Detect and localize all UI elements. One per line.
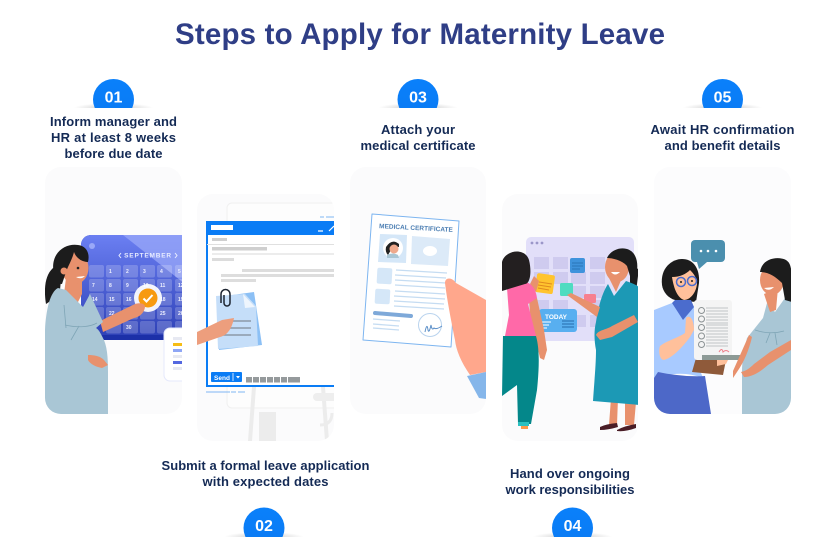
hand — [197, 318, 234, 345]
calendar: 7 — [92, 283, 95, 289]
step 05 — [650, 79, 795, 414]
badge 02: 02 — [255, 518, 273, 535]
certificate — [363, 214, 459, 347]
icon: orange check badge — [134, 284, 162, 312]
email window — [197, 221, 342, 386]
step 01 — [45, 79, 182, 414]
caption 02: Submit a formal leave application — [162, 458, 370, 473]
title: Steps to Apply for Maternity Leave — [175, 18, 665, 51]
caption 01: before due date — [64, 146, 162, 161]
pregnant employee — [733, 258, 795, 414]
calendar: SEPTEMBER — [124, 252, 172, 260]
caption 04 — [504, 466, 634, 497]
colleague in pink — [502, 252, 547, 429]
pregnant woman in teal — [567, 248, 640, 431]
caption 01: Inform manager and — [50, 114, 177, 129]
badge 03: 03 — [409, 90, 427, 106]
badge 01: 01 — [105, 90, 122, 106]
illustration: HR person with pregnant employee — [654, 240, 791, 414]
calendar: 16 — [126, 297, 132, 303]
today card: TODAY — [545, 314, 568, 321]
badge 05: 05 — [714, 90, 732, 106]
attached document — [216, 290, 262, 350]
illustration: medical certificate in hand — [362, 214, 486, 399]
calendar: 22 — [109, 311, 115, 317]
calendar — [81, 235, 182, 340]
calendar: 23 — [126, 311, 132, 317]
calendar: 15 — [109, 297, 115, 303]
caption 03 — [360, 122, 476, 153]
HR woman — [654, 259, 728, 414]
calendar: 25 — [160, 311, 166, 317]
sticky notes — [535, 258, 596, 303]
send button: Send — [214, 375, 230, 382]
planning board — [526, 237, 634, 341]
woman — [45, 245, 145, 414]
badge 02 — [230, 508, 298, 537]
caption 03: Attach your — [381, 122, 455, 137]
badge 05 — [688, 79, 756, 108]
calendar: 5 — [178, 269, 181, 275]
calendar: 18 — [160, 297, 166, 303]
calendar: 11 — [160, 283, 166, 289]
caption 04: Hand over ongoing — [510, 466, 630, 481]
certificate: MEDICAL CERTIFICATE — [379, 223, 454, 234]
calendar: 19 — [178, 297, 184, 303]
illustration: email with attached document — [197, 202, 334, 441]
calendar: 26 — [178, 311, 184, 317]
step 02 — [162, 194, 370, 548]
small list card — [164, 328, 182, 382]
speech bubble — [691, 240, 725, 269]
calendar: 10 — [143, 283, 149, 289]
caption 04: work responsibilities — [504, 482, 634, 497]
calendar: 8 — [109, 283, 112, 289]
illustration: woman pointing at calendar — [45, 235, 182, 414]
background board and stand — [226, 202, 334, 441]
calendar: 4 — [160, 269, 163, 275]
badge 03 — [384, 79, 452, 108]
caption 05: and benefit details — [664, 138, 780, 153]
badge 01 — [80, 79, 148, 108]
calendar: 9 — [126, 283, 129, 289]
caption 02: with expected dates — [202, 474, 328, 489]
calendar: 30 — [126, 325, 132, 331]
calendar: 2 — [126, 269, 129, 275]
caption 01 — [50, 114, 177, 161]
hand — [445, 278, 486, 399]
calendar: 3 — [143, 269, 146, 275]
badge 04 — [538, 508, 606, 537]
badge 04: 04 — [564, 518, 582, 535]
illustration: handover at planning board — [502, 237, 638, 432]
calendar: 14 — [92, 297, 98, 303]
calendar: 1 — [109, 269, 112, 275]
caption 02 — [162, 458, 370, 489]
step 04 — [502, 237, 638, 537]
checklist — [694, 300, 742, 360]
caption 05: Await HR confirmation — [650, 122, 795, 137]
send button — [211, 372, 242, 382]
caption 01: HR at least 8 weeks — [51, 130, 176, 145]
caption 05 — [650, 122, 795, 153]
caption 03: medical certificate — [360, 138, 476, 153]
step 03 — [361, 79, 486, 399]
calendar: 12 — [178, 283, 184, 289]
